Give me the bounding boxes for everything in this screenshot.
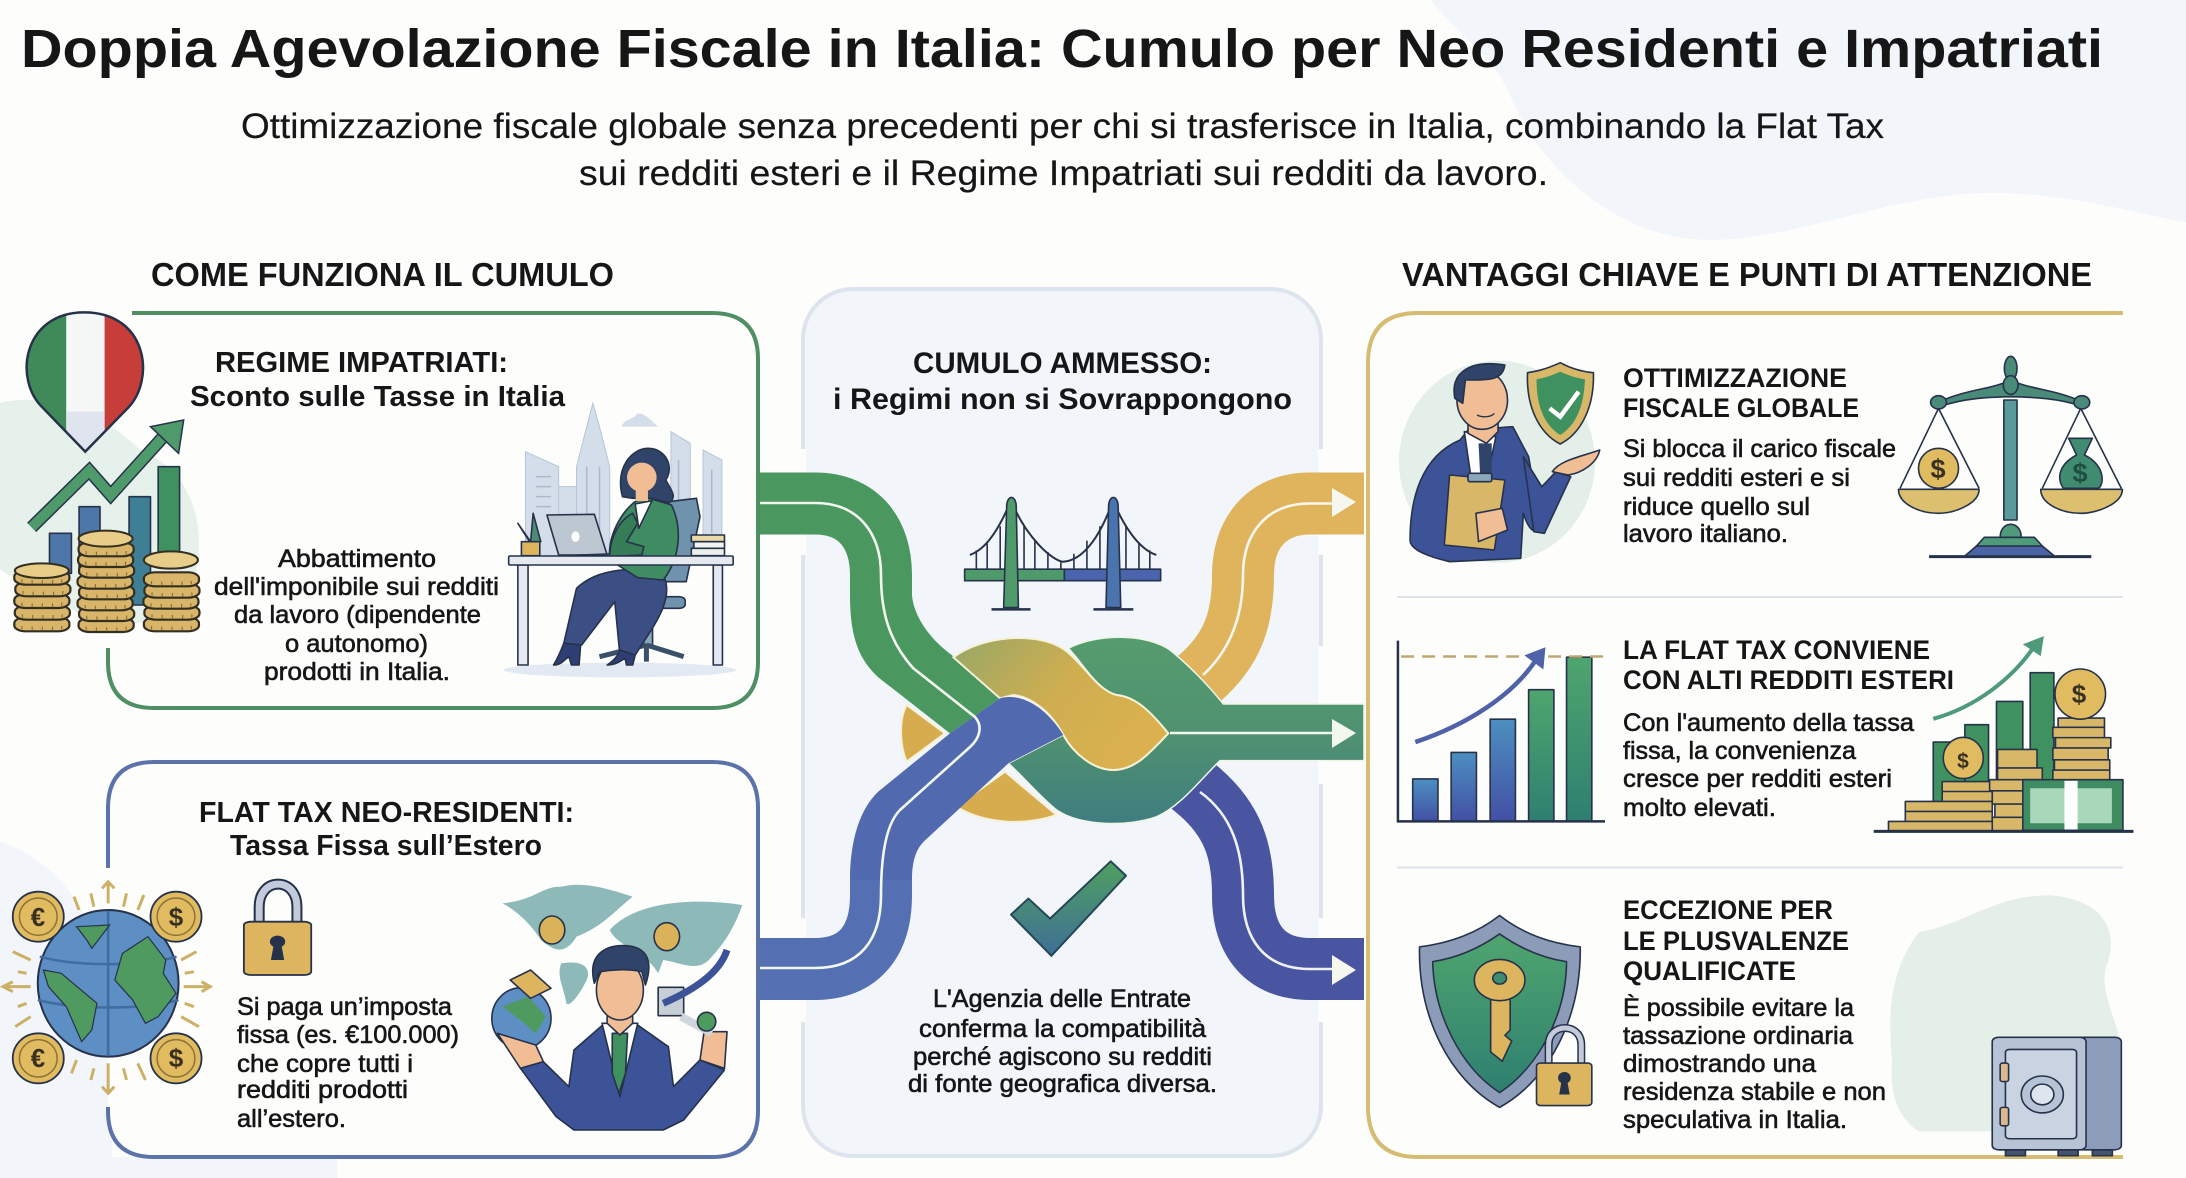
ribbon: green input: [760, 504, 881, 596]
background blob: left green: [0, 400, 199, 625]
subtitle: [241, 107, 1885, 193]
title: Doppia Agevolazione Fiscale in Italia: Cumulo per Neo Residenti e Impatriati: [21, 19, 2103, 79]
text: agenzia delle entrate: L'Agenzia delle Entrate: [933, 985, 1191, 1013]
knot: blue strand: [850, 697, 1063, 880]
knot: green strand: [1008, 637, 1364, 823]
icon: coin stacks and banknotes: $: [1957, 750, 1969, 773]
knot: [850, 595, 1364, 880]
text: ottimizzazione fiscale globale: riduce quello sul: [1623, 493, 1810, 521]
text: eccezione per le plusvalenze: ECCEZIONE PER: [1623, 895, 1833, 925]
text: eccezione per le plusvalenze: tassazione ordinaria: [1623, 1022, 1853, 1050]
text: abbattimento: [214, 545, 499, 686]
text: ottimizzazione fiscale globale: sui redditi esteri e si: [1623, 464, 1850, 492]
heading: flat tax: FLAT TAX NEO-RESIDENTI:: [199, 797, 574, 829]
heading: regime impatriati: REGIME IMPATRIATI:: [215, 347, 508, 379]
ribbon center line: green to blue: [760, 503, 980, 968]
text: abbattimento: da lavoro (dipendente: [234, 601, 481, 629]
text: la flat tax conviene: Con l'aumento della tassa: [1623, 709, 1914, 737]
heading: cumulo ammesso: CUMULO AMMESSO:: [913, 347, 1212, 380]
heading: regime impatriati: Sconto sulle Tasse in Italia: [190, 381, 566, 413]
text: ottimizzazione fiscale globale: Si blocca il carico fiscale: [1623, 435, 1896, 463]
text: agenzia delle entrate: di fonte geografica diversa.: [908, 1070, 1217, 1098]
text: imposta fissa: [237, 993, 459, 1133]
icon: padlock: [244, 884, 311, 975]
background blob: lower left blue: [0, 842, 337, 1178]
text: abbattimento: Abbattimento: [278, 545, 436, 573]
text: eccezione per le plusvalenze: speculativa in Italia.: [1623, 1106, 1847, 1134]
icon: safe: [1992, 1037, 2121, 1156]
text: eccezione per le plusvalenze: È possibile evitare la: [1623, 993, 1854, 1022]
icon: check mark: [1011, 861, 1126, 956]
heading: cumulo ammesso: i Regimi non si Sovrappongono: [833, 383, 1292, 416]
icon: italy pin: [25, 311, 144, 454]
text: eccezione per le plusvalenze: LE PLUSVALENZE: [1623, 926, 1849, 956]
text: ottimizzazione fiscale globale: OTTIMIZZAZIONE: [1623, 363, 1847, 393]
text: agenzia delle entrate: [908, 985, 1217, 1098]
text: abbattimento: o autonomo): [285, 630, 428, 658]
background blob: top right: [1430, 0, 2186, 240]
text: imposta fissa: fissa (es. €100.000): [237, 1021, 459, 1049]
icon: shield with key and lock: [1419, 915, 1592, 1107]
knot: green ribbon end: [850, 595, 1000, 733]
heading: flat tax: Tassa Fissa sull’Estero: [230, 830, 542, 862]
heading: regime impatriati: [190, 347, 566, 413]
icon: coin stacks and banknotes: $: [2072, 679, 2087, 709]
icon: globe with currency coins: [3, 882, 210, 1093]
panel: regime impatriati: [14, 310, 758, 708]
section heading: right: VANTAGGI CHIAVE E PUNTI DI ATTENZIONE: [1402, 256, 2092, 293]
illustration: world map and businessman: [492, 885, 742, 1130]
panel: vantaggi chiave: [1368, 313, 2133, 1157]
text: la flat tax conviene: LA FLAT TAX CONVIENE: [1623, 635, 1930, 665]
text: eccezione per le plusvalenze: QUALIFICATE: [1623, 956, 1796, 986]
illustration: advisor with shield: [1399, 361, 1600, 563]
text: imposta fissa: redditi prodotti: [237, 1076, 408, 1104]
text: ottimizzazione fiscale globale: FISCALE GLOBALE: [1623, 393, 1859, 423]
ribbon center line: green arrow: [1170, 719, 1356, 748]
text: la flat tax conviene: [1623, 635, 1954, 822]
icon: globe with currency coins: €: [31, 902, 45, 932]
text: la flat tax conviene: cresce per redditi esteri: [1623, 765, 1892, 793]
text: la flat tax conviene: CON ALTI REDDITI ESTERI: [1623, 665, 1954, 695]
icon: growth chart and coins: [14, 420, 199, 632]
text: eccezione per le plusvalenze: dimostrando una: [1623, 1050, 1816, 1078]
text: ottimizzazione fiscale globale: lavoro italiano.: [1623, 520, 1788, 548]
knot: gold lobes: [901, 705, 1057, 822]
text: imposta fissa: all’estero.: [237, 1105, 346, 1133]
icon: globe with currency coins: $: [169, 1043, 184, 1073]
chart: rising bars: [1398, 641, 1605, 821]
text: la flat tax conviene: fissa, la convenienza: [1623, 737, 1856, 765]
icon: scales: [1898, 356, 2122, 557]
icon: globe with currency coins: $: [169, 902, 184, 932]
panel: cumulo ammesso: [801, 289, 1323, 1156]
text: abbattimento: dell'imponibile sui redditi: [214, 573, 499, 601]
text: eccezione per le plusvalenze: [1623, 895, 1886, 1134]
heading: flat tax: [199, 797, 574, 862]
icon: bridge: [965, 497, 1161, 609]
icon: globe with currency coins: €: [31, 1043, 45, 1073]
subtitle: sui redditi esteri e il Regime Impatriati sui redditi da lavoro.: [579, 154, 1548, 193]
section heading: left: COME FUNZIONA IL CUMULO: [151, 256, 614, 293]
blob behind safe: [1890, 895, 2119, 1131]
subtitle: Ottimizzazione fiscale globale senza precedenti per chi si trasferisce in Italia, combinando la Flat Tax: [241, 107, 1885, 146]
ribbon: blue input: [760, 879, 881, 969]
text: imposta fissa: che copre tutti i: [237, 1050, 413, 1078]
text: abbattimento: prodotti in Italia.: [264, 658, 450, 686]
text: la flat tax conviene: molto elevati.: [1623, 794, 1776, 822]
heading: cumulo ammesso: [833, 347, 1292, 416]
icon: scales: $: [1930, 454, 1946, 484]
ribbon: gold output: [1150, 488, 1364, 715]
text: agenzia delle entrate: conferma la compatibilità: [919, 1015, 1206, 1043]
text: ottimizzazione fiscale globale: [1623, 363, 1896, 548]
text: imposta fissa: Si paga un’imposta: [237, 993, 452, 1021]
text: eccezione per le plusvalenze: residenza stabile e non: [1623, 1078, 1886, 1106]
knot: gold strand: [953, 638, 1168, 770]
illustration: woman at desk: [504, 403, 736, 677]
panel: flat tax neo-residenti: [3, 762, 758, 1157]
ribbon: purple output: [1150, 750, 1364, 985]
text: agenzia delle entrate: perché agiscono su redditi: [913, 1043, 1212, 1071]
icon: coin stacks and banknotes: [1874, 636, 2133, 832]
icon: scales: $: [2072, 458, 2088, 488]
